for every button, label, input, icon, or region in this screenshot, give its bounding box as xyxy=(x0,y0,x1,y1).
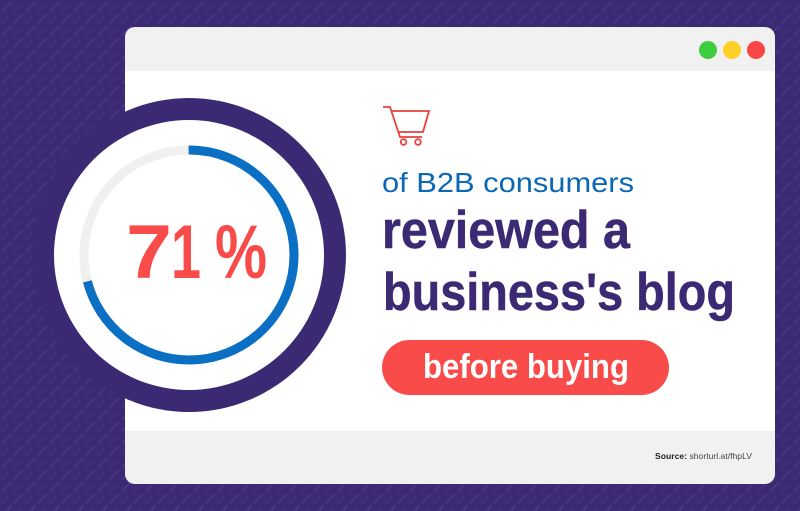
panel: browser window xyxy=(125,27,775,484)
stat: 71%: % xyxy=(215,210,267,295)
text: of B2B consumers: of B2B consumers xyxy=(382,167,634,198)
icon: red window button xyxy=(747,41,765,59)
icon: yellow window button xyxy=(723,41,741,59)
callout: before buying xyxy=(382,340,669,395)
chart: 71 percent donut xyxy=(32,98,346,412)
icon: shopping cart xyxy=(383,107,429,145)
icon: green window button xyxy=(699,41,717,59)
heading: reviewed a: reviewed a xyxy=(382,201,630,260)
stat: 71% xyxy=(126,210,267,295)
heading: business's blog: business's blog xyxy=(383,263,735,322)
text: source: Source: shorturl.at/fhpLV xyxy=(655,451,752,461)
stat: 71%: 7 xyxy=(126,210,172,295)
callout: before buying: before buying xyxy=(423,348,629,386)
stat: 71%: 1 xyxy=(171,210,201,295)
